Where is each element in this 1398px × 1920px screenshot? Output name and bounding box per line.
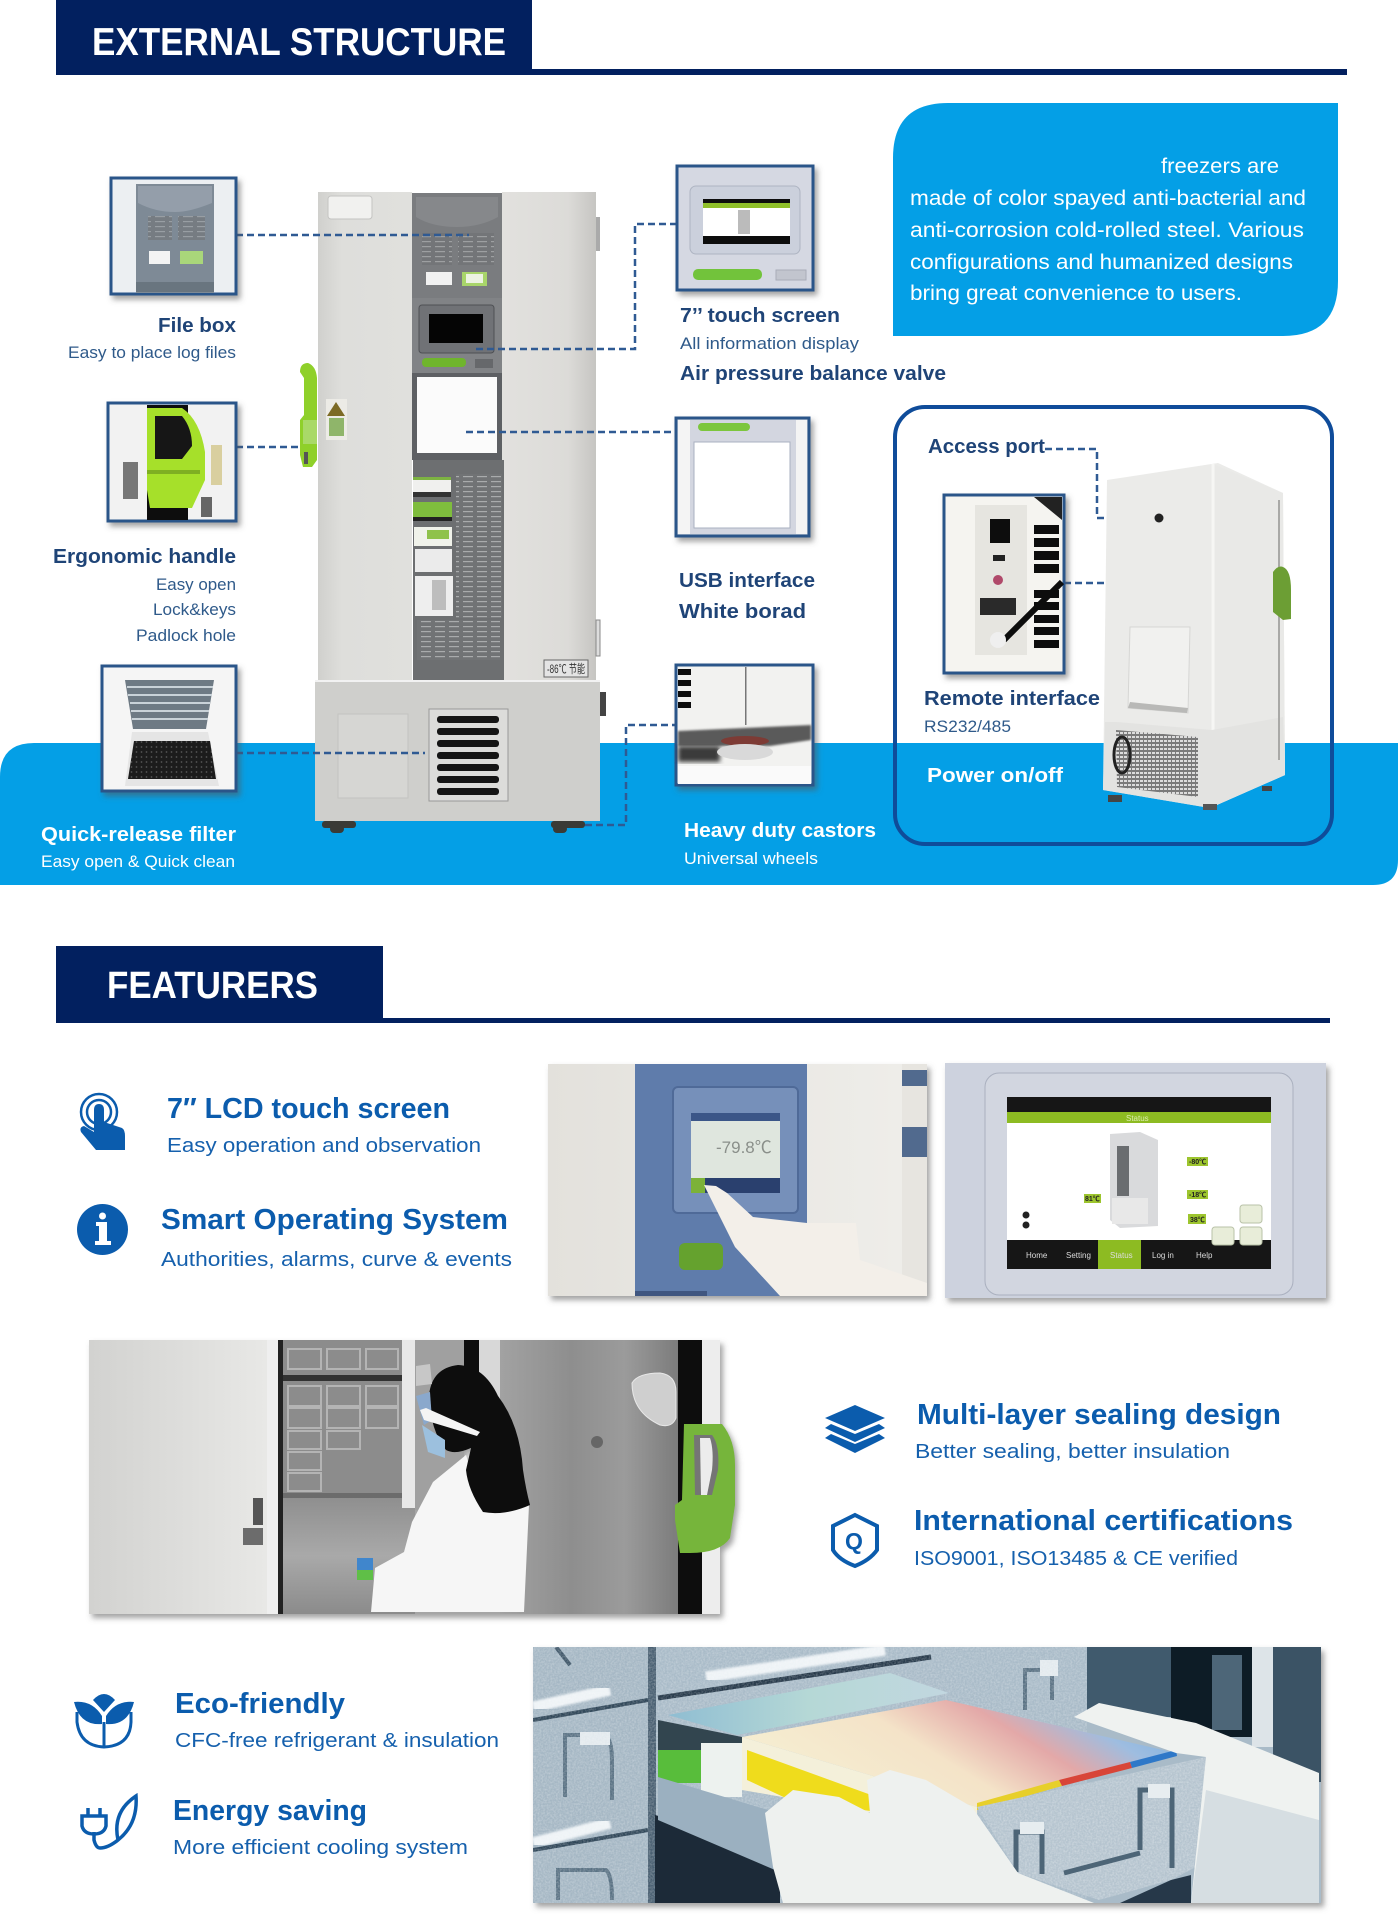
thumbnail: quick-release filter	[102, 666, 236, 791]
thumbnail: castors	[676, 665, 813, 785]
photo: frozen sample rack	[533, 1647, 1321, 1903]
label: quick-release filter	[41, 824, 236, 871]
photo: status screen: 38℃	[1190, 1216, 1205, 1224]
feature text: eco: CFC-free refrigerant & insulation	[175, 1730, 499, 1752]
feature text: sealing: Better sealing, better insulation	[915, 1441, 1230, 1463]
callout: freezer description: anti-corrosion cold-rolled steel. Various	[910, 219, 1304, 242]
label: ergonomic handle: Ergonomic handle	[53, 546, 236, 568]
scientist	[357, 1364, 530, 1612]
label: castors	[684, 820, 876, 868]
label: quick-release filter: Easy open & Quick clean	[41, 853, 235, 871]
label: file box: File box	[158, 315, 236, 337]
thumbnail: ergonomic handle	[108, 403, 236, 521]
label: quick-release filter: Quick-release filter	[41, 824, 236, 846]
heading: featurers	[56, 946, 1330, 1023]
photo: status screen: Home	[1026, 1251, 1048, 1260]
rear panel labels: Remote interface	[924, 688, 1100, 710]
feature text: sealing	[915, 1399, 1281, 1463]
rear panel labels: Access port	[928, 436, 1045, 458]
feature text: eco	[175, 1688, 499, 1752]
label: ergonomic handle: Lock&keys	[153, 601, 236, 619]
tray side	[658, 1777, 775, 1870]
sample rack	[658, 1673, 1177, 1815]
photo: status screen: 81℃	[1085, 1195, 1100, 1203]
feature text: energy: Energy saving	[173, 1795, 367, 1827]
background band	[0, 743, 1398, 885]
photo: status screen: Setting	[1066, 1251, 1091, 1260]
icon: certification shield	[833, 1515, 877, 1566]
handle on freezer door	[675, 1424, 735, 1553]
rear panel labels	[924, 436, 1100, 787]
feature text: touch screen: Easy operation and observation	[167, 1135, 481, 1157]
label: USB and white board: USB interface	[679, 570, 815, 592]
feature text: certifications	[914, 1505, 1293, 1570]
label: touch screen	[680, 305, 946, 385]
icon: layers	[825, 1405, 885, 1453]
screen module	[412, 298, 502, 373]
icon: information	[77, 1204, 128, 1255]
label: file box	[68, 315, 236, 362]
photo: scientist at freezer	[89, 1340, 735, 1614]
label: ergonomic handle	[53, 546, 236, 645]
metal box side	[977, 1757, 1206, 1900]
photo: finger on touch screen	[548, 1064, 927, 1296]
icon: eco leaf	[74, 1694, 134, 1747]
label: file box: Easy to place log files	[68, 344, 236, 362]
icon: plug and leaf	[82, 1796, 136, 1848]
rear freezer illustration	[1103, 463, 1291, 810]
label: touch screen: 7’’ touch screen	[680, 305, 840, 327]
label: ergonomic handle: Easy open	[156, 576, 236, 594]
feature text: certifications: ISO9001, ISO13485 & CE verified	[914, 1548, 1238, 1570]
callout: freezer description: bring great convenience to users.	[910, 282, 1242, 305]
centre panel	[412, 193, 502, 298]
icon: certification shield: Q	[845, 1528, 863, 1554]
frosted drawers	[533, 1647, 1058, 1903]
dashed connector lines	[236, 224, 1159, 825]
photo: finger on touch screen: -79.8℃	[716, 1138, 772, 1157]
photo: status screen: Status	[1126, 1114, 1149, 1123]
photo: status screen: -18℃	[1189, 1191, 1206, 1199]
label: USB and white board: White borad	[679, 601, 806, 623]
freezer handle	[300, 363, 317, 467]
model label: -86℃ 节能	[547, 662, 585, 676]
label: castors: Heavy duty castors	[684, 820, 876, 842]
dark cabinet interior	[1087, 1647, 1321, 1782]
gloved hands	[765, 1703, 1319, 1903]
label: ergonomic handle: Padlock hole	[136, 627, 236, 645]
callout: freezer description: configurations and humanized designs	[910, 251, 1293, 274]
heading: external structure	[56, 0, 1347, 75]
feature text: operating system: Smart Operating System	[161, 1204, 508, 1236]
feature text: touch screen: 7″ LCD touch screen	[167, 1093, 450, 1125]
model label	[544, 660, 588, 677]
label: touch screen: Air pressure balance valve	[680, 363, 946, 385]
heading: featurers: FEATURERS	[107, 965, 318, 1007]
feature text: touch screen	[167, 1093, 481, 1157]
thumbnail: white board	[676, 418, 809, 536]
white board	[412, 373, 502, 460]
heading: external structure: EXTERNAL STRUCTURE	[92, 21, 506, 64]
dark space under tray	[655, 1815, 780, 1903]
label: castors: Universal wheels	[684, 850, 818, 868]
feature text: eco: Eco-friendly	[175, 1688, 345, 1720]
feature text: certifications: International certifications	[914, 1505, 1293, 1537]
photo: status screen: Help	[1196, 1251, 1213, 1260]
photo: status screen: Status	[1110, 1251, 1133, 1260]
thumbnail: file box	[111, 178, 236, 294]
feature text: operating system: Authorities, alarms, curve & events	[161, 1249, 512, 1271]
feature text: sealing: Multi-layer sealing design	[917, 1399, 1281, 1431]
feature text: energy: More efficient cooling system	[173, 1837, 468, 1859]
frost texture	[533, 1647, 1087, 1903]
castors	[322, 821, 585, 833]
icon: touch hand	[80, 1094, 125, 1150]
feature text: operating system	[161, 1204, 512, 1271]
callout: freezer description	[893, 103, 1338, 336]
callout: freezer description: freezers are	[1161, 155, 1279, 178]
vent	[429, 709, 508, 801]
label: USB and white board	[679, 570, 815, 623]
service panel	[338, 714, 408, 798]
panel: rear view	[895, 407, 1332, 844]
thumbnail: touch screen	[677, 166, 813, 290]
warning stickers	[326, 399, 347, 440]
photo: status screen: -80℃	[1189, 1158, 1206, 1166]
callout: freezer description: made of color spayed anti-bacterial and	[910, 187, 1306, 210]
rear panel labels: RS232/485	[924, 718, 1011, 736]
photo: status screen	[945, 1063, 1326, 1298]
rear panel labels: Power on/off	[927, 765, 1063, 787]
label: touch screen: All information display	[680, 335, 860, 353]
feature text: energy	[173, 1795, 468, 1859]
thumbnail: remote interface	[944, 495, 1064, 673]
stickers on panel	[413, 460, 504, 680]
photo: status screen: Log in	[1152, 1251, 1174, 1260]
main freezer illustration	[300, 192, 606, 833]
